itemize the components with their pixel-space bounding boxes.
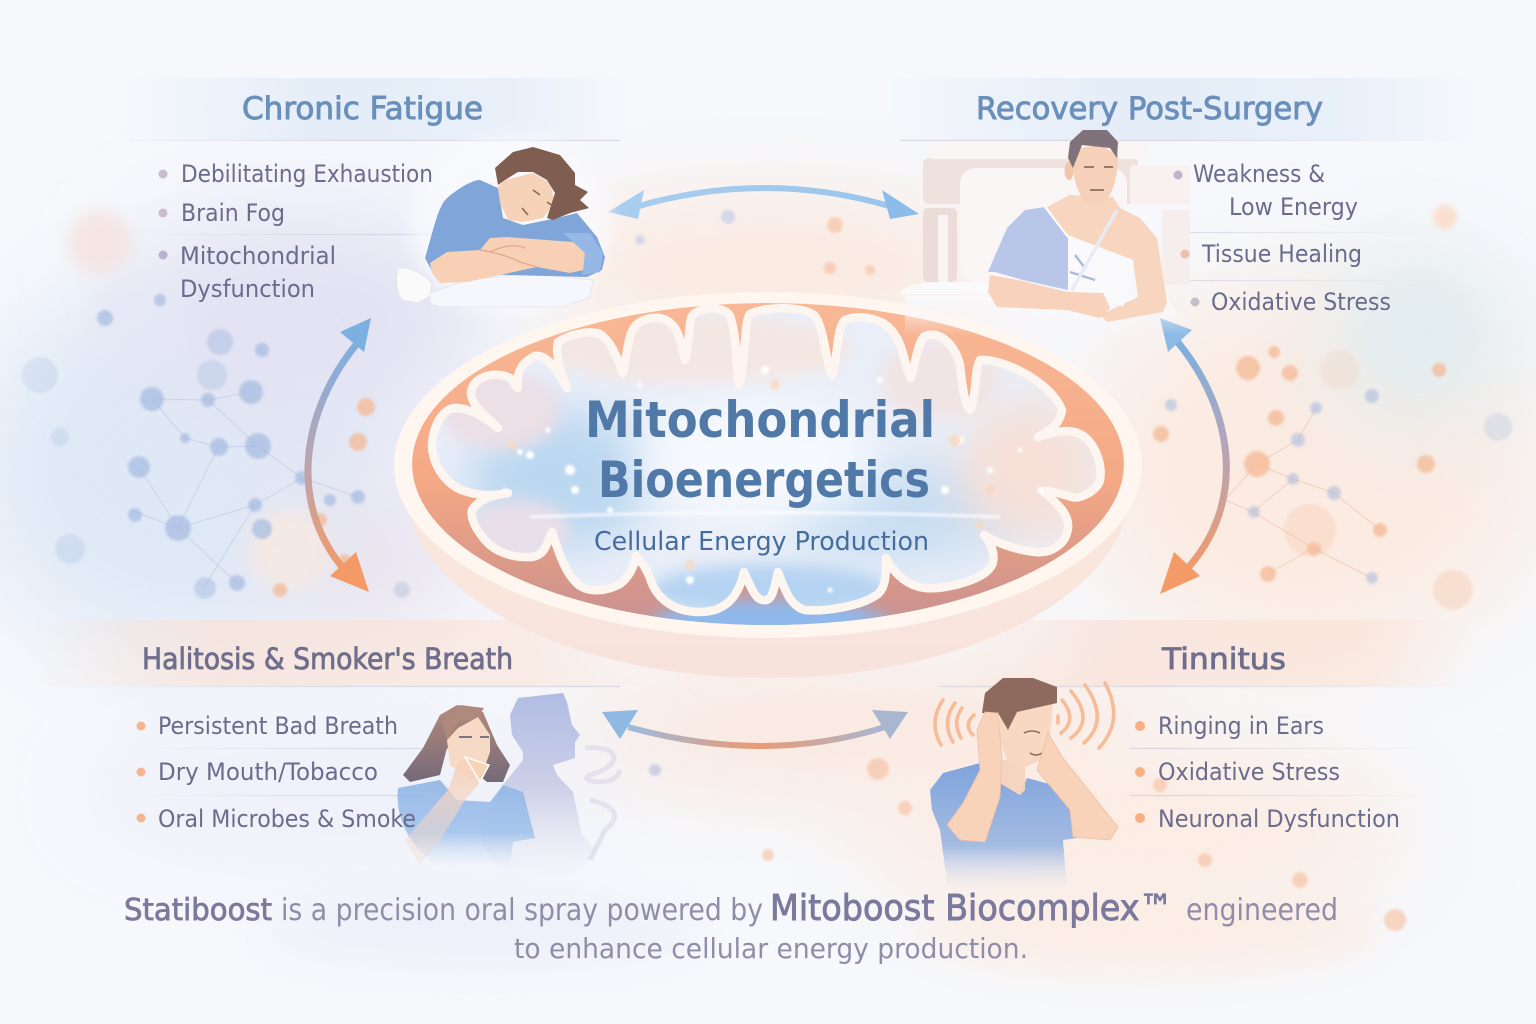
list: Mitochondrial — [180, 242, 336, 270]
footer statement: Statiboost — [124, 893, 272, 928]
footer statement: to enhance cellular energy production. — [514, 932, 1028, 965]
figure: post-surgery man in bed — [900, 130, 1190, 335]
list: Persistent Bad Breath — [158, 712, 398, 740]
list: Oral Microbes & Smoke — [158, 805, 416, 833]
molecular network: right — [1153, 346, 1512, 610]
title: Mitochondrial Bioenergetics: Mitochondrial — [585, 391, 935, 449]
list: Brain Fog — [181, 199, 285, 227]
list — [1174, 160, 1391, 316]
list: Dysfunction — [180, 275, 315, 303]
cristae membrane — [432, 308, 1101, 612]
heading: Recovery Post-Surgery — [976, 91, 1323, 127]
footer statement — [124, 888, 1338, 965]
title: Mitochondrial Bioenergetics: Bioenergetics — [598, 451, 930, 509]
banner: Tinnitus — [950, 620, 1470, 686]
footer statement: Mitoboost Biocomplex™ — [770, 888, 1173, 929]
figure: man with tinnitus — [930, 678, 1118, 890]
title: Mitochondrial Bioenergetics — [585, 391, 935, 509]
arrow: right — [1160, 318, 1226, 594]
heading: Halitosis & Smoker's Breath — [142, 642, 513, 676]
list: Debilitating Exhaustion — [181, 160, 433, 188]
matrix interior — [436, 312, 1096, 608]
panel: Chronic Fatigue text — [158, 91, 483, 303]
smoke wisps — [585, 748, 620, 860]
banner: Recovery Post-Surgery — [880, 78, 1480, 140]
figure: woman with bad breath and silhouette — [398, 693, 620, 880]
list — [136, 712, 416, 833]
arrow: top — [608, 188, 919, 219]
list — [1135, 712, 1400, 833]
lower body — [406, 298, 1130, 678]
rules under panels — [60, 140, 1470, 796]
bed and pillow — [900, 142, 1190, 335]
mitochondrion — [394, 292, 1142, 678]
list: Dry Mouth/Tobacco — [158, 758, 378, 786]
heading: Tinnitus — [1161, 642, 1286, 676]
scattered particles: lower and upper centre — [635, 210, 1406, 931]
footer statement: engineered — [1186, 893, 1338, 928]
list: Weakness & — [1193, 160, 1325, 188]
panel: Halitosis text — [136, 642, 513, 833]
sparkles — [503, 366, 1043, 592]
list — [158, 160, 433, 303]
arrow: bottom — [602, 710, 908, 746]
list: Neuronal Dysfunction — [1158, 805, 1400, 833]
outer membrane rim — [394, 292, 1142, 638]
figure: resting woman with fatigue — [396, 135, 610, 315]
panel: Recovery Post-Surgery text — [976, 91, 1391, 316]
banner: Halitosis — [30, 620, 650, 686]
intermembrane orange — [412, 303, 1124, 651]
silhouette — [480, 693, 597, 880]
footer statement: is a precision oral spray powered by — [281, 893, 763, 928]
sound waves — [935, 683, 1114, 748]
subtitle: Cellular Energy Production — [594, 527, 929, 557]
molecular network: left — [22, 294, 410, 599]
list: Oxidative Stress — [1158, 758, 1340, 786]
list: Ringing in Ears — [1158, 712, 1324, 740]
list: Oxidative Stress — [1211, 288, 1391, 316]
banner: Chronic Fatigue — [120, 78, 630, 140]
list: Tissue Healing — [1201, 240, 1362, 268]
arrow: left — [308, 318, 371, 592]
list: Low Energy — [1229, 193, 1358, 221]
panel: Tinnitus text — [1135, 642, 1400, 833]
heading: Chronic Fatigue — [242, 91, 483, 127]
